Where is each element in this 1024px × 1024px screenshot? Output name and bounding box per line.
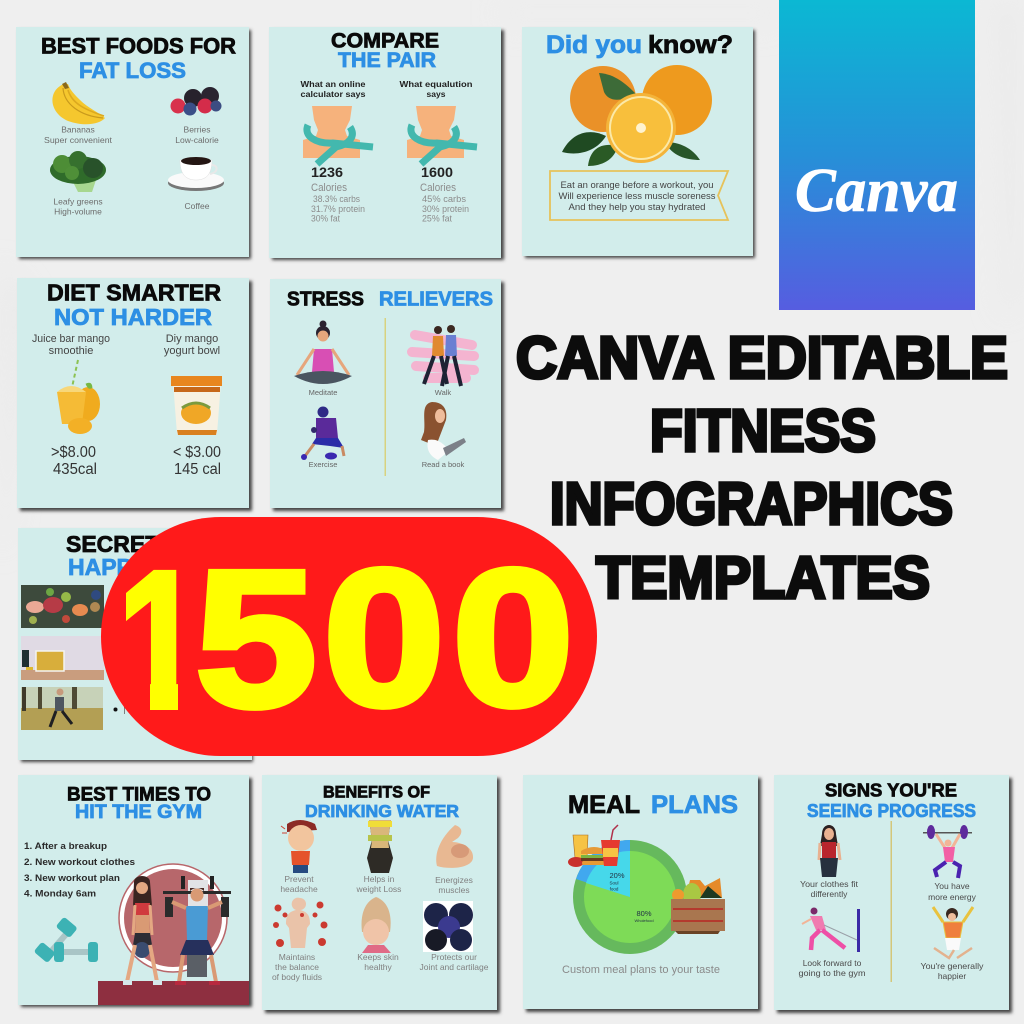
icon: oranges: [562, 65, 712, 166]
labels: top row: Energizes: [435, 875, 473, 885]
right values: 30% protein: [422, 204, 469, 214]
labels: top row: Helps in: [364, 874, 395, 884]
food labels: Leafy greens: [53, 196, 103, 206]
chart: pie 80/20: 80%: [636, 909, 652, 918]
heading: [66, 531, 159, 580]
icon: waist tape right: [407, 106, 477, 164]
heading: HIT THE GYM: [75, 801, 202, 823]
label: exercise and book: Exercise: [309, 460, 337, 469]
badge: 1500: 1: [118, 531, 202, 749]
right values: [420, 165, 469, 224]
food labels: Low-calorie: [175, 135, 219, 145]
labels: bottom row: You're generally: [920, 961, 984, 971]
icon: towel woman: [362, 897, 391, 953]
labels: top row: Your clothes fit: [800, 879, 859, 889]
heading: [568, 791, 738, 819]
right values: 25% fat: [422, 214, 452, 224]
chart: pie 80/20: Wholefood: [634, 918, 654, 923]
badge: 1500: 0: [452, 529, 574, 747]
numbered list: [24, 841, 135, 900]
numbered list: 1. After a breakup: [24, 841, 107, 852]
heading: [305, 784, 459, 821]
labels: bottom row: [272, 952, 489, 982]
label: exercise and book: Read a book: [422, 460, 465, 469]
price and calories: < $3.00: [173, 444, 221, 461]
labels: bottom row: the balance: [275, 962, 319, 972]
label: meditate and walk: Walk: [435, 388, 451, 397]
icon: leafy greens: [50, 151, 106, 192]
heading: [331, 30, 439, 72]
heading: [807, 780, 976, 821]
label: exercise and book: [309, 460, 465, 469]
bullet: [114, 705, 125, 714]
numbered list: 3. New workout plan: [24, 873, 120, 884]
left values: 30% fat: [311, 214, 340, 224]
callout banner: [550, 171, 728, 220]
chart: pie 80/20: [573, 840, 687, 954]
heading: FAT LOSS: [79, 58, 186, 83]
panel: did you know: [522, 27, 755, 258]
labels: top row: Prevent: [284, 874, 314, 884]
heading: MEAL: [568, 791, 640, 819]
badge: 1500: 5: [195, 530, 317, 748]
panel: meal plans: [523, 775, 761, 1012]
icon: mango smoothie: [57, 360, 100, 434]
icon: crate of produce: [671, 878, 725, 934]
heading: SEEING PROGRESS: [807, 800, 976, 821]
food labels: Super convenient: [44, 135, 113, 145]
icon: waist tape left: [303, 106, 373, 164]
column headings: What an online: [300, 79, 366, 89]
column headings: What equalution: [400, 79, 472, 89]
left values: [311, 165, 365, 224]
column headings: says: [427, 89, 446, 99]
labels: bottom row: Keeps skin: [357, 952, 399, 962]
panel: compare the pair: [269, 27, 504, 260]
icon: exercise: [301, 406, 344, 460]
labels: top row: [280, 874, 473, 895]
icon: mango yogurt tub: [171, 376, 222, 435]
panel: diet smarter: [17, 278, 252, 511]
panel: best times to hit the gym: [18, 775, 252, 1007]
right values: 45% carbs: [422, 194, 467, 204]
numbered list: 2. New workout clothes: [24, 857, 135, 868]
right values: Calories: [420, 182, 456, 194]
food labels: [44, 124, 219, 216]
labels: bottom row: of body fluids: [272, 972, 322, 982]
heading: NOT HARDER: [54, 304, 212, 330]
photo: laptop desk: [21, 636, 104, 680]
icon: jumping woman: [933, 907, 973, 958]
title: TEMPLATES: [596, 545, 930, 611]
heading: BEST FOODS FOR: [41, 34, 236, 58]
labels: bottom row: Look forward to: [803, 958, 862, 968]
column headings: [300, 79, 472, 99]
callout banner: Will experience less muscle soreness: [558, 191, 716, 202]
heading: HAPPY: [68, 554, 147, 580]
chart: pie 80/20: 20%: [609, 871, 625, 880]
labels: bottom row: Protects our: [431, 952, 477, 962]
heading: BEST TIMES TO: [67, 784, 211, 806]
labels: top row: muscles: [438, 885, 470, 895]
labels: bottom row: [798, 958, 984, 981]
icon: meditate: [294, 320, 352, 384]
left values: 31.7% protein: [311, 204, 365, 214]
panel: secrets to happiness: [18, 528, 253, 762]
labels: bottom row: happier: [938, 971, 966, 981]
heading: [546, 31, 733, 59]
title: INFOGRAPHICS: [550, 471, 953, 537]
label: meditate and walk: Meditate: [309, 388, 337, 397]
panel: benefits of drinking water: [262, 775, 500, 1013]
panel: stress relievers: [270, 279, 504, 511]
labels: top row: [800, 879, 977, 902]
price and calories: >$8.00: [51, 444, 96, 461]
left values: 38.3% carbs: [313, 194, 360, 204]
icon: weight lifter: [923, 825, 972, 878]
food labels: Coffee: [185, 201, 210, 211]
heading: STRESS: [287, 288, 364, 310]
heading: know?: [648, 31, 733, 59]
title: FITNESS: [650, 398, 876, 464]
comparison labels: smoothie: [49, 345, 93, 357]
labels: top row: You have: [934, 881, 970, 891]
chart: pie 80/20: food: [610, 886, 619, 892]
icon: woman with loose clothes: [819, 825, 840, 877]
heading: [41, 34, 236, 83]
badge: 1500: [101, 517, 597, 756]
heading: [287, 288, 493, 310]
price and calories: 145 cal: [174, 461, 221, 478]
heading: COMPARE: [331, 30, 439, 52]
caption: Custom meal plans to your taste: [562, 964, 720, 976]
icon: bicep: [436, 825, 473, 868]
canva logo card: Canva: [795, 157, 958, 225]
heading: SECRET: [66, 531, 159, 557]
heading: DRINKING WATER: [305, 801, 459, 821]
labels: top row: differently: [811, 889, 848, 899]
left values: 1236: [311, 165, 344, 180]
heading: [67, 784, 211, 823]
illustration: gym couple: [98, 864, 249, 1005]
heading: [47, 280, 221, 330]
icon: waist measure: [367, 820, 393, 873]
icon: read a book: [421, 402, 466, 460]
panel: best foods for fat loss: [16, 27, 251, 259]
canva logo card: [779, 0, 975, 310]
panel: signs you're seeing progress: [774, 775, 1012, 1013]
heading: RELIEVERS: [379, 288, 493, 310]
food labels: High-volume: [54, 206, 102, 216]
title: CANVA EDITABLE: [516, 325, 1008, 391]
icon: body fluids: [273, 898, 328, 948]
left values: Calories: [311, 182, 347, 194]
title: [516, 325, 1008, 611]
labels: bottom row: healthy: [364, 962, 392, 972]
heading: THE PAIR: [338, 49, 436, 72]
right values: 1600: [421, 165, 453, 180]
labels: top row: more energy: [928, 892, 977, 902]
heading: PLANS: [651, 791, 738, 819]
comparison labels: [32, 333, 220, 357]
callout banner: Eat an orange before a workout, you: [560, 180, 714, 191]
icon: joints: [423, 901, 473, 952]
food labels: Bananas: [61, 124, 95, 134]
photo: healthy food: [21, 585, 104, 628]
icon: headache boy: [281, 820, 317, 873]
icon: walk: [412, 325, 474, 386]
icon: band lunge: [802, 908, 860, 952]
callout banner: And they help you stay hydrated: [568, 202, 706, 213]
labels: bottom row: Maintains: [279, 952, 315, 962]
labels: bottom row: going to the gym: [798, 968, 866, 978]
heading: DIET SMARTER: [47, 280, 221, 306]
column headings: calculator says: [300, 89, 366, 99]
icon: dumbbells: [34, 917, 98, 963]
icon: coffee: [168, 157, 224, 191]
icon: bananas: [52, 82, 105, 124]
labels: top row: headache: [280, 884, 318, 894]
photo: forest lunge: [21, 687, 103, 730]
heading: SIGNS YOU'RE: [825, 780, 957, 800]
icon: fast food: [568, 825, 620, 867]
chart: pie 80/20: Soul: [609, 880, 619, 886]
food labels: Berries: [184, 124, 210, 134]
heading: Did you: [546, 31, 642, 59]
numbered list: 4. Monday 6am: [24, 888, 96, 900]
comparison labels: Juice bar mango: [32, 333, 110, 345]
comparison labels: yogurt bowl: [164, 345, 220, 357]
badge: 1500: 0: [323, 529, 445, 747]
price and calories: 435cal: [53, 461, 97, 478]
labels: top row: weight Loss: [356, 884, 401, 894]
icon: berries: [170, 87, 222, 116]
label: meditate and walk: [309, 388, 451, 397]
labels: bottom row: Joint and cartilage: [420, 962, 489, 972]
heading: BENEFITS OF: [323, 784, 430, 802]
comparison labels: Diy mango: [166, 333, 218, 345]
price and calories: [51, 444, 221, 478]
